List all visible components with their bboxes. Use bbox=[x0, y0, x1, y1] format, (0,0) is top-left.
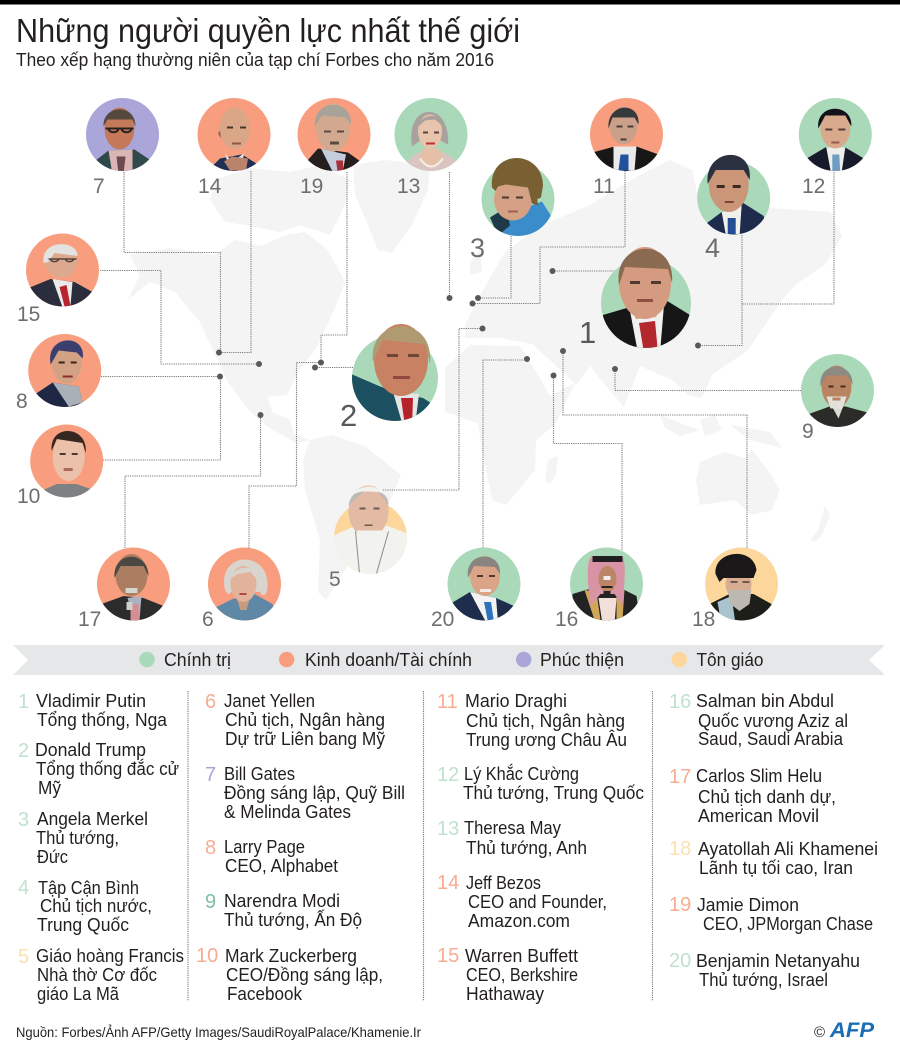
rank numbers on map: 15 bbox=[17, 303, 40, 326]
AFP logo: AFP bbox=[829, 1019, 875, 1042]
rank numbers on map: 18 bbox=[692, 608, 715, 631]
rank numbers on map: 1 bbox=[579, 315, 596, 350]
portrait 9: Narendra Modi bbox=[801, 354, 874, 430]
entry 16 bbox=[669, 691, 848, 749]
rank numbers on map: 14 bbox=[198, 175, 222, 198]
entry 3: Angela Merkel bbox=[37, 809, 148, 829]
rank numbers on map: 10 bbox=[17, 485, 40, 508]
entry 18: Ayatollah Ali Khamenei bbox=[698, 839, 878, 859]
portrait 20: Benjamin Netanyahu bbox=[448, 548, 520, 624]
column dividers bbox=[188, 691, 652, 1001]
entry 4 bbox=[18, 877, 152, 935]
entry 12: 12 bbox=[437, 764, 459, 786]
entry 9: 9 bbox=[205, 891, 216, 913]
entry 6: Dự trữ Liên bang Mỹ bbox=[225, 729, 385, 749]
entry 17 bbox=[669, 766, 836, 826]
entry 16: Quốc vương Aziz al bbox=[698, 711, 848, 731]
legend band bbox=[13, 645, 885, 675]
entry 6 bbox=[205, 691, 385, 749]
entry 15: Warren Buffett bbox=[465, 946, 578, 966]
rank numbers on map: 20 bbox=[431, 608, 454, 631]
entry 7: & Melinda Gates bbox=[224, 802, 351, 822]
rank numbers on map: 3 bbox=[470, 233, 485, 263]
entry 5: giáo La Mã bbox=[37, 984, 120, 1004]
entry 3: Đức bbox=[37, 847, 68, 867]
entry 14 bbox=[437, 872, 607, 931]
rank numbers on map: 12 bbox=[802, 175, 825, 198]
legend: business and finance: Kinh doanh/Tài chính bbox=[305, 650, 472, 670]
entry 14: CEO and Founder, bbox=[468, 892, 607, 912]
entry 1: Tổng thống, Nga bbox=[37, 710, 168, 730]
entry 13: 13 bbox=[437, 818, 459, 840]
entry 9 bbox=[205, 891, 362, 930]
entry 8: CEO, Alphabet bbox=[225, 856, 338, 876]
entry 10 bbox=[196, 945, 383, 1004]
entry 15 bbox=[437, 945, 578, 1004]
entry 2: Mỹ bbox=[38, 778, 61, 798]
title: Những người quyền lực nhất thế giới bbox=[16, 12, 520, 49]
portrait 7: Bill Gates bbox=[86, 98, 159, 174]
entry 3: 3 bbox=[18, 809, 29, 831]
entry 17: American Movil bbox=[698, 806, 819, 826]
portrait 8: Larry Page bbox=[28, 334, 101, 410]
entry 10: Facebook bbox=[227, 984, 303, 1004]
entry 11: Trung ương Châu Âu bbox=[466, 730, 627, 750]
entry 4: Tập Cận Bình bbox=[38, 878, 139, 898]
portrait 14: Jeff Bezos bbox=[198, 98, 270, 174]
entry 8: 8 bbox=[205, 837, 216, 859]
entry 18: Lãnh tụ tối cao, Iran bbox=[699, 858, 853, 878]
legend: philanthropy: Phúc thiện bbox=[540, 650, 624, 670]
portrait 13: Theresa May bbox=[394, 98, 468, 174]
entry 20 bbox=[669, 950, 860, 990]
entry 13: Thủ tướng, Anh bbox=[466, 838, 587, 858]
entry 2: 2 bbox=[18, 740, 29, 762]
entry 17: Chủ tịch danh dự, bbox=[698, 787, 836, 807]
entry 11: Mario Draghi bbox=[465, 691, 567, 711]
entry 11: Chủ tịch, Ngân hàng bbox=[466, 711, 625, 731]
portrait 16: King Salman bbox=[570, 548, 643, 624]
entry 19: 19 bbox=[669, 894, 691, 916]
entry 12 bbox=[437, 763, 644, 803]
entry 16: 16 bbox=[669, 691, 691, 713]
rank numbers on map: 5 bbox=[329, 568, 341, 591]
rank numbers on map: 6 bbox=[202, 608, 214, 631]
portrait 5: Pope Francis bbox=[334, 486, 408, 578]
entry 9: Thủ tướng, Ấn Độ bbox=[224, 909, 362, 930]
entry 1: 1 bbox=[18, 691, 29, 713]
entry 13 bbox=[437, 818, 587, 858]
entry 19: Jamie Dimon bbox=[697, 895, 799, 915]
entry 14: 14 bbox=[437, 872, 459, 894]
rank numbers on map: 11 bbox=[593, 175, 615, 198]
portrait 2: Donald Trump bbox=[351, 324, 439, 428]
entry 17: Carlos Slim Helu bbox=[696, 766, 822, 786]
entry 16: Saud, Saudi Arabia bbox=[698, 729, 844, 749]
list column 2 bbox=[196, 691, 405, 1004]
entry 7 bbox=[205, 764, 405, 822]
rank numbers on map: 19 bbox=[300, 175, 323, 198]
entry 1: Vladimir Putin bbox=[36, 691, 146, 711]
entry 19 bbox=[669, 894, 873, 934]
entry 2: Tổng thống đắc cử bbox=[36, 758, 179, 779]
entry 7: 7 bbox=[205, 764, 216, 786]
entry 15: 15 bbox=[437, 945, 459, 967]
entry 14: Amazon.com bbox=[468, 911, 570, 931]
entry 11 bbox=[437, 691, 627, 750]
entry 3: Thủ tướng, bbox=[36, 828, 119, 848]
entry 6: Chủ tịch, Ngân hàng bbox=[225, 710, 385, 730]
source credit: Nguồn: Forbes/Ảnh AFP/Getty Images/SaudiRoyalPalace/Khamenie.Ir bbox=[16, 1024, 421, 1040]
rank numbers on map: 7 bbox=[93, 175, 105, 198]
world map background bbox=[128, 160, 842, 600]
entry 15: Hathaway bbox=[466, 984, 544, 1004]
entry 10: 10 bbox=[196, 945, 218, 967]
entry 17: 17 bbox=[669, 766, 691, 788]
portrait 19: Jamie Dimon bbox=[298, 98, 370, 174]
entry 7: Đồng sáng lập, Quỹ Bill bbox=[224, 783, 405, 803]
location dots bbox=[216, 268, 701, 418]
entry 18: 18 bbox=[669, 838, 691, 860]
portrait 4: Xi Jinping bbox=[697, 155, 770, 238]
portrait 3: Angela Merkel bbox=[482, 158, 554, 240]
entry 12: Thủ tướng, Trung Quốc bbox=[463, 783, 644, 803]
portrait 6: Janet Yellen bbox=[208, 548, 281, 624]
portrait 18: Ali Khamenei bbox=[705, 548, 778, 624]
entry 15: CEO, Berkshire bbox=[466, 965, 578, 985]
portrait 1: Vladimir Putin bbox=[600, 247, 692, 353]
rank numbers on map: 9 bbox=[802, 420, 814, 443]
entry 7: Bill Gates bbox=[224, 764, 295, 784]
entry 3 bbox=[18, 809, 148, 867]
entry 6: Janet Yellen bbox=[224, 691, 315, 711]
entry 20: 20 bbox=[669, 950, 691, 972]
entry 20: Benjamin Netanyahu bbox=[696, 951, 860, 971]
rank numbers on map: 16 bbox=[555, 608, 578, 631]
portrait 11: Mario Draghi bbox=[590, 98, 663, 174]
rank numbers on map: 17 bbox=[78, 608, 101, 631]
entry 5: Giáo hoàng Francis bbox=[36, 946, 184, 966]
entry 5: Nhà thờ Cơ đốc bbox=[37, 965, 157, 985]
entry 9: Narendra Modi bbox=[224, 891, 340, 911]
list column 1 bbox=[18, 691, 184, 1004]
entry 16: Salman bin Abdul bbox=[696, 691, 834, 711]
entry 1 bbox=[18, 691, 168, 730]
portrait 12: Li Keqiang bbox=[799, 98, 872, 174]
entry 13: Theresa May bbox=[464, 818, 561, 838]
list column 3 bbox=[437, 691, 644, 1004]
entry 11: 11 bbox=[437, 691, 458, 713]
subtitle: Theo xếp hạng thường niên của tạp chí Forbes cho năm 2016 bbox=[16, 50, 494, 70]
entry 18 bbox=[669, 838, 878, 878]
rank numbers on map: 2 bbox=[340, 398, 357, 433]
entry 2: Donald Trump bbox=[35, 740, 146, 760]
portrait 17: Carlos Slim bbox=[97, 548, 170, 624]
top black bar bbox=[0, 0, 900, 4]
legend: politics: Chính trị bbox=[164, 650, 231, 670]
rank numbers on map bbox=[16, 175, 825, 631]
AFP logo: © bbox=[814, 1024, 825, 1041]
portrait 15: Warren Buffett bbox=[26, 234, 99, 310]
entry 5: 5 bbox=[18, 946, 29, 968]
connector lines bbox=[100, 171, 834, 550]
AFP logo bbox=[814, 1019, 875, 1042]
rank numbers on map: 13 bbox=[397, 175, 420, 198]
entry 4: Chủ tịch nước, bbox=[40, 896, 152, 916]
entry 20: Thủ tướng, Israel bbox=[699, 970, 828, 990]
entry 8 bbox=[205, 837, 338, 876]
entry 14: Jeff Bezos bbox=[466, 873, 541, 893]
entry 19: CEO, JPMorgan Chase bbox=[703, 914, 873, 934]
entry 4: Trung Quốc bbox=[37, 915, 129, 935]
entry 12: Lý Khắc Cường bbox=[464, 763, 579, 784]
entry 6: 6 bbox=[205, 691, 216, 713]
rank numbers on map: 8 bbox=[16, 390, 28, 413]
entry 2 bbox=[18, 740, 179, 798]
legend: religion: Tôn giáo bbox=[696, 650, 764, 670]
list column 4 bbox=[669, 691, 878, 990]
entry 4: 4 bbox=[18, 877, 29, 899]
entry 5 bbox=[18, 946, 184, 1004]
rank numbers on map: 4 bbox=[705, 233, 720, 263]
portrait 10: Mark Zuckerberg bbox=[30, 424, 103, 501]
entry 10: CEO/Đồng sáng lập, bbox=[226, 965, 383, 985]
entry 10: Mark Zuckerberg bbox=[225, 946, 357, 966]
entry 8: Larry Page bbox=[224, 837, 305, 857]
